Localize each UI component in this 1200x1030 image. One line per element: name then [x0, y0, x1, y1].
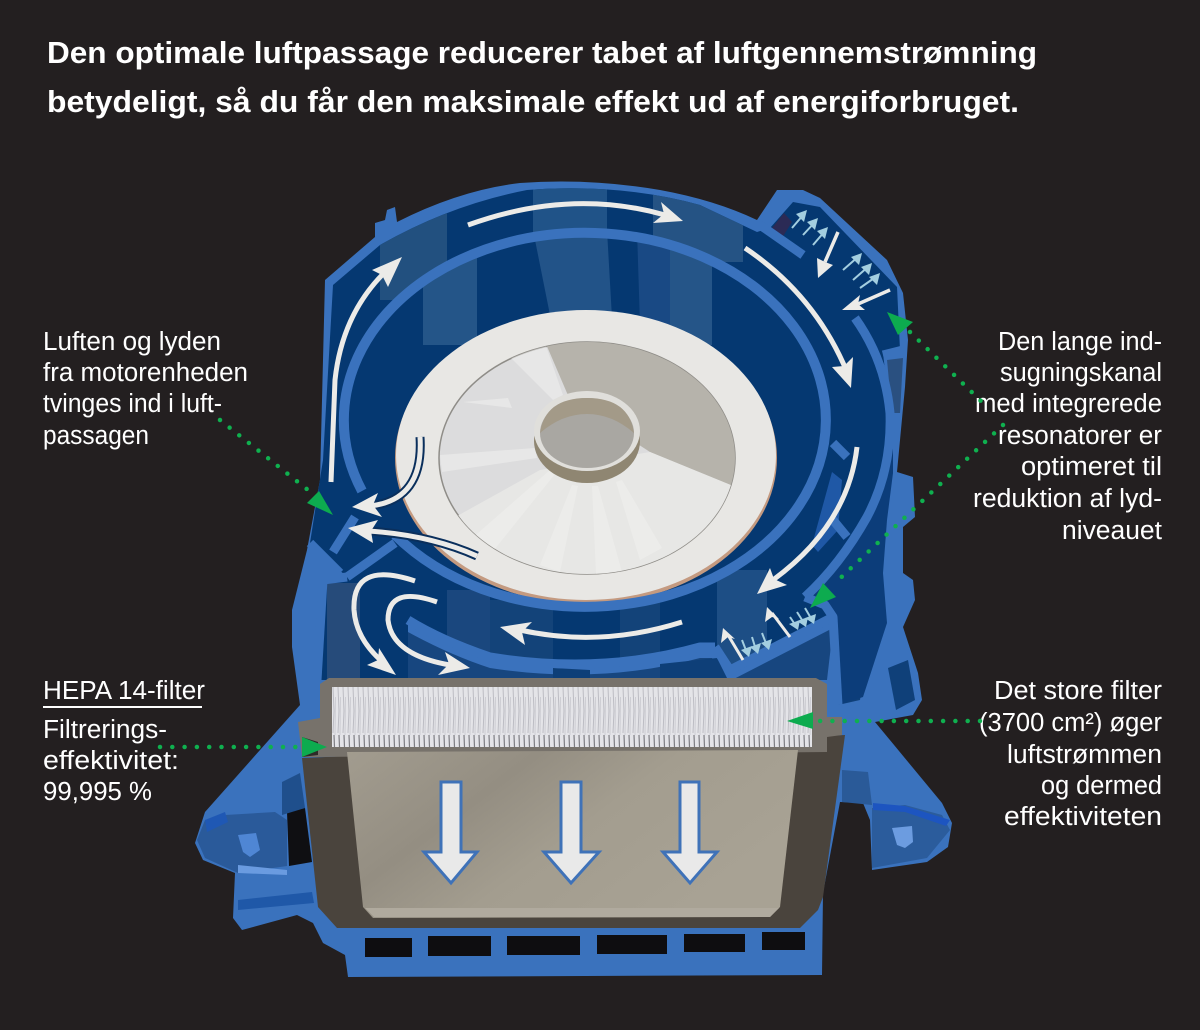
upper channel [310, 188, 900, 680]
label: air and sound from motor: Luften og lyden [43, 328, 221, 356]
label: large filter: (3700 cm²) øger [979, 709, 1163, 737]
channel stripes [327, 180, 842, 680]
filter housing [298, 678, 845, 928]
arrow: bottom [500, 622, 682, 645]
label: HEPA 14 filter: Filtrerings- [43, 716, 167, 744]
HEPA pleats [332, 687, 812, 747]
down arrow 1 [424, 782, 477, 883]
label: long intake channel: reduktion af lyd- [973, 485, 1162, 513]
inner chamber stripes [423, 230, 712, 345]
arrow: disc outlet lower [348, 520, 477, 556]
impeller disc [395, 310, 777, 604]
label: large filter: luftstrømmen [1007, 741, 1162, 769]
label: long intake channel: sugningskanal [1000, 359, 1162, 387]
filter plate [347, 750, 798, 918]
impeller hub [534, 391, 640, 483]
down arrow 3 [663, 782, 717, 883]
bottom vents [365, 932, 805, 957]
vent corner [772, 213, 792, 238]
title: betydeligt, så du får den maksimale effekt ud af energiforbruget. [47, 84, 1019, 119]
diagram: air passage housing [195, 180, 952, 977]
label: large filter: Det store filter [994, 677, 1163, 705]
label: large filter: effektiviteten [1004, 803, 1162, 831]
arrow: chamber outer [354, 575, 415, 675]
label: large filter: og dermed [1041, 772, 1162, 800]
label: long intake channel: niveauet [1062, 517, 1162, 545]
label: long intake channel: optimeret til [1021, 453, 1162, 481]
housing body [195, 182, 952, 977]
arrow: right lower [757, 447, 857, 594]
outer and tab walls [310, 225, 903, 705]
arrow: chamber inner [388, 596, 470, 675]
arrow: left [331, 257, 402, 482]
inner chamber [344, 233, 826, 607]
callout: large filter pointer [787, 712, 980, 729]
filter frame [298, 678, 842, 757]
label: long intake channel: med integrerede [975, 390, 1162, 418]
arrow: disc outlet upper [352, 437, 420, 517]
right lower dark body [805, 440, 893, 705]
callout: HEPA filter pointer [160, 737, 327, 757]
label: long intake channel: Den lange ind- [998, 328, 1162, 356]
sliver beside outer wall [887, 358, 903, 413]
resonator arrows top [792, 210, 890, 310]
label: HEPA 14 filter: 99,995 % [43, 778, 152, 806]
right flange detail [837, 660, 950, 868]
label: HEPA 14 filter: effektivitet: [43, 747, 179, 775]
label: air and sound from motor: fra motorenheden [43, 359, 248, 387]
label: air and sound from motor: tvinges ind i luft- [43, 390, 222, 418]
callout: intake channel pointer lower [810, 425, 1003, 608]
label: long intake channel [973, 328, 1163, 545]
airflow arrows [331, 202, 857, 675]
left flange detail [197, 773, 314, 910]
label: HEPA 14 filter: HEPA 14-filter [43, 677, 206, 705]
arrow: top [468, 202, 683, 225]
lower mid panel [408, 628, 833, 682]
label: air and sound from motor: passagen [43, 422, 149, 450]
arrow: right upper [745, 248, 853, 388]
down arrow 2 [544, 782, 599, 883]
label: large filter [979, 677, 1163, 831]
resonator arrows bottom [721, 607, 816, 660]
callout: motor air pointer [220, 420, 333, 515]
title: Den optimale luftpassage reducerer tabet af luftgennemstrømning [47, 35, 1037, 70]
label: HEPA 14 filter [43, 677, 206, 806]
callout: intake channel pointer upper [887, 312, 985, 405]
label: air and sound from motor [43, 328, 248, 450]
label: long intake channel: resonatorer er [998, 422, 1163, 450]
inner wall ring [344, 233, 826, 607]
title [47, 35, 1037, 119]
